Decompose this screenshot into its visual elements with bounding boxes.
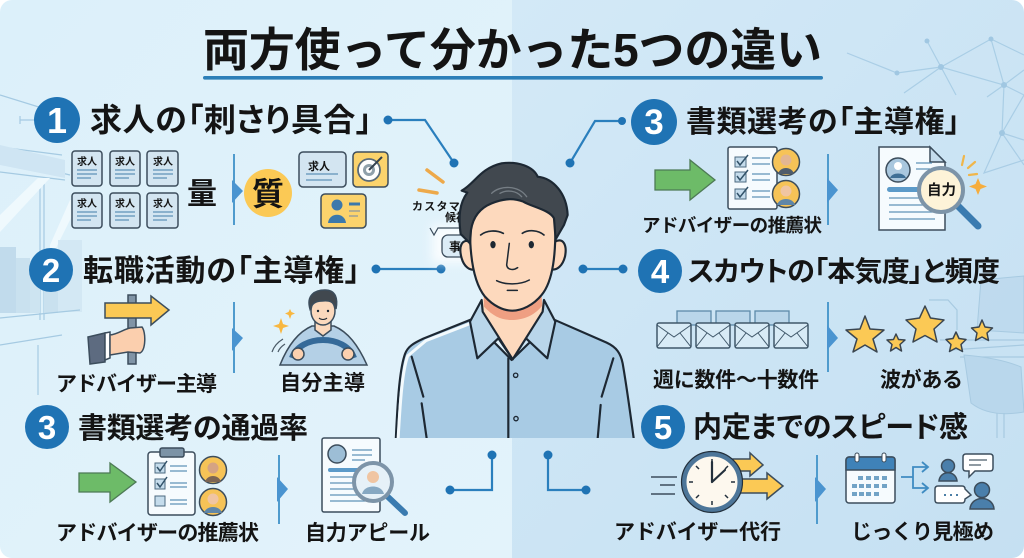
heading 5 bbox=[641, 405, 968, 449]
icon: adviser avatars bbox=[200, 456, 226, 516]
icon: clock with arrows bbox=[651, 452, 783, 512]
heading 3 left bbox=[25, 405, 308, 449]
heading 3 right: 3 bbox=[644, 103, 664, 142]
job cards: quantity: 求人 bbox=[153, 155, 173, 168]
heading 2: 転職活動の「主導権」 bbox=[83, 255, 360, 288]
panel: 2 転職活動の主導権 bbox=[29, 248, 367, 396]
icon: resume with magnifier bbox=[322, 438, 405, 513]
divider bbox=[232, 302, 243, 373]
heading 1 bbox=[34, 97, 372, 143]
person illustration bbox=[395, 163, 635, 450]
job card: quality bbox=[299, 152, 346, 187]
heading 1: 求人の「刺さり具合」 bbox=[90, 102, 372, 138]
icon: calendar bbox=[846, 453, 895, 503]
job cards: quantity: 求人 bbox=[115, 197, 135, 210]
speech bubbles behind the person: 事 bbox=[449, 239, 461, 254]
heading 3 left: 書類選考の通過率 bbox=[78, 412, 308, 445]
background: desk and monitor bbox=[929, 276, 1024, 438]
icon: clipboard bbox=[148, 448, 195, 515]
divider bbox=[815, 455, 826, 524]
icon: sparkle bbox=[962, 156, 987, 195]
panel: 5 内定までのスピード感 bbox=[614, 405, 994, 544]
shirt bbox=[395, 319, 635, 450]
divider bbox=[232, 154, 243, 225]
heading 2 bbox=[29, 248, 360, 292]
job cards: quantity: 求人 bbox=[153, 197, 173, 210]
icon: branching arrows bbox=[901, 462, 928, 493]
icon: adviser avatars bbox=[772, 148, 800, 208]
heading 3 right: 書類選考の「主導権」 bbox=[686, 106, 960, 139]
collar bbox=[470, 300, 513, 359]
nose and mouth bbox=[507, 243, 518, 269]
divider bbox=[827, 154, 838, 225]
label じっくり見極め: じっくり見極め bbox=[851, 521, 994, 544]
label アドバイザーの推薦状: アドバイザーの推薦状 bbox=[642, 215, 822, 236]
label 質: 質 bbox=[252, 176, 284, 212]
divider bbox=[827, 302, 838, 372]
icon: green arrow bbox=[655, 160, 715, 200]
icon: envelopes bbox=[657, 311, 808, 348]
speech bubbles behind the person: 候補 bbox=[445, 210, 467, 224]
panel: 1 求人の刺さり具合 bbox=[34, 97, 388, 228]
background: left half bbox=[0, 0, 512, 558]
neck bbox=[482, 297, 543, 359]
heading 4: 4 bbox=[651, 253, 670, 290]
divider bbox=[277, 455, 288, 524]
job cards: quantity: 求人 bbox=[77, 155, 97, 168]
icon: document with 自力 magnifier bbox=[879, 147, 978, 230]
icon: document with 自力 magnifier: 自力 bbox=[927, 181, 956, 199]
icon: profile card bbox=[321, 194, 366, 228]
job cards: quantity: 求人 bbox=[77, 197, 97, 210]
heading 4: スカウトの「本気度」と頻度 bbox=[688, 256, 1000, 287]
label 量: 量 bbox=[187, 178, 217, 211]
eyebrows and eyes bbox=[481, 231, 544, 235]
background: right half bbox=[512, 0, 1024, 558]
title: 両方使って分かった5つの違い bbox=[203, 24, 822, 76]
speech bubbles behind the person: カスタマー bbox=[412, 200, 472, 213]
speech bubbles behind the person bbox=[413, 168, 463, 271]
label 波がある: 波がある bbox=[880, 368, 963, 392]
label 自分主導: 自分主導 bbox=[280, 372, 365, 395]
icon: green arrow bbox=[79, 463, 136, 502]
heading 5: 5 bbox=[654, 409, 672, 446]
label 自力アピール: 自力アピール bbox=[305, 522, 430, 545]
icon: target bbox=[353, 152, 388, 187]
icon: signpost held by hand bbox=[88, 295, 169, 364]
heading 5: 内定までのスピード感 bbox=[693, 411, 968, 444]
icon: checklist bbox=[728, 147, 777, 209]
background: office window bbox=[0, 95, 82, 395]
label アドバイザー主導: アドバイザー主導 bbox=[56, 373, 217, 396]
panel: 4 スカウトの本気度と頻度 bbox=[638, 249, 1000, 392]
icon: stars bbox=[846, 306, 992, 352]
label アドバイザー代行: アドバイザー代行 bbox=[614, 521, 781, 544]
job cards: quantity: 求人 bbox=[115, 155, 135, 168]
panel: 3 書類選考の主導権 bbox=[631, 99, 987, 236]
face bbox=[470, 187, 555, 311]
ears bbox=[460, 241, 474, 270]
label アドバイザーの推薦状: アドバイザーの推薦状 bbox=[56, 522, 259, 545]
icon: driver at the wheel bbox=[272, 290, 367, 365]
heading 4 bbox=[638, 249, 1000, 293]
label 質 bbox=[244, 169, 292, 217]
heading 3 right bbox=[631, 99, 960, 145]
job card: quality: 求人 bbox=[308, 159, 330, 173]
hair bbox=[460, 163, 568, 243]
label 週に数件〜十数件: 週に数件〜十数件 bbox=[653, 369, 819, 392]
heading 3 left: 3 bbox=[38, 409, 56, 446]
icon: people talking bbox=[935, 454, 994, 509]
background: network graph bbox=[847, 36, 1024, 173]
heading 1: 1 bbox=[47, 100, 67, 141]
job cards: quantity bbox=[72, 151, 178, 228]
heading 2: 2 bbox=[42, 252, 60, 289]
connectors bbox=[372, 116, 628, 494]
panel: 3 書類選考の通過率 bbox=[25, 405, 430, 545]
